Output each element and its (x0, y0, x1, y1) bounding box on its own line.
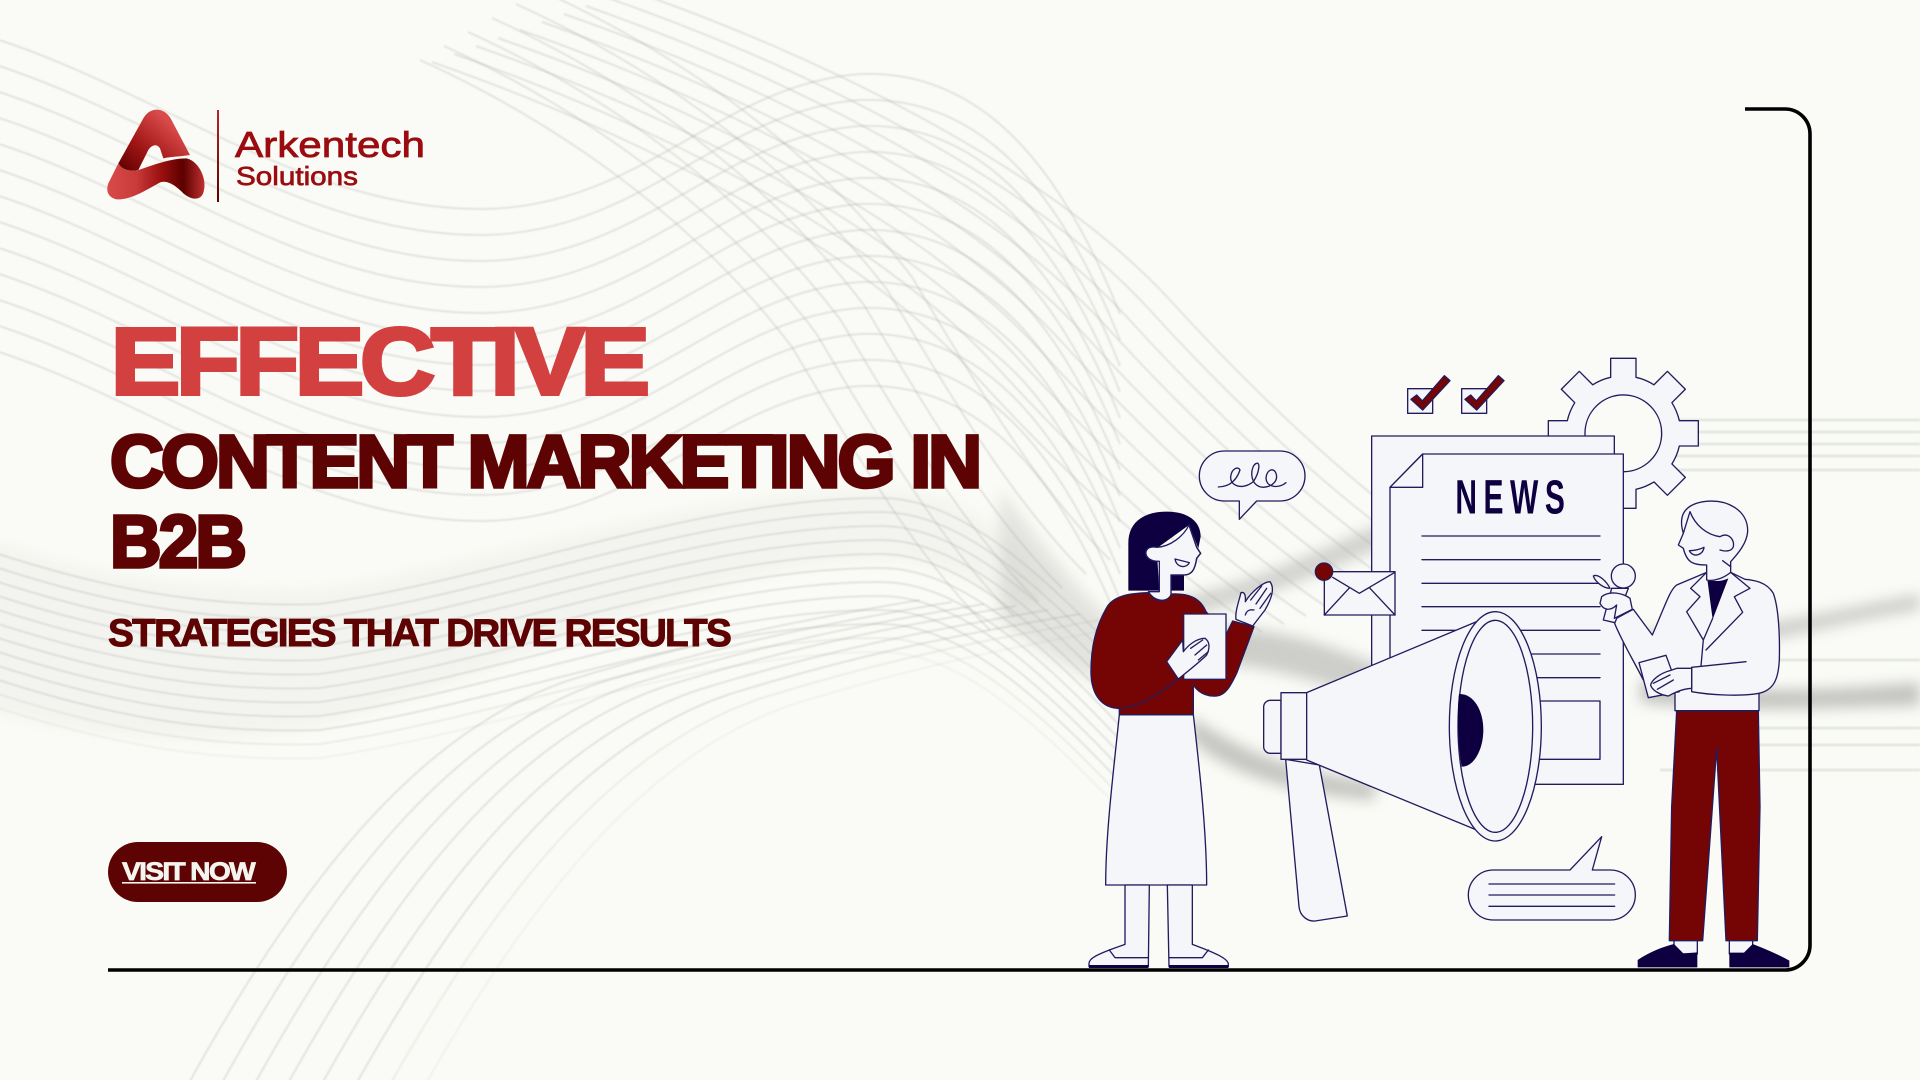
man head (1678, 501, 1748, 580)
woman sweater (1091, 593, 1254, 715)
logo wordmark: Arkentech (235, 124, 425, 165)
woman hair (1128, 512, 1201, 591)
button: visit now (108, 842, 287, 902)
button: visit now: VISIT NOW (122, 858, 256, 886)
woman (1089, 512, 1272, 968)
man note card (1639, 655, 1679, 698)
man jacket (1613, 572, 1779, 711)
heading: effective: EFFECTIVE (111, 309, 646, 415)
icon: checkboxes (1408, 376, 1504, 413)
woman legs and shoes (1089, 885, 1228, 968)
megaphone bell (1449, 612, 1541, 841)
icon: logo mark (107, 110, 205, 199)
background wave lines (0, 0, 1460, 1080)
logo subtitle: Solutions (236, 161, 358, 191)
megaphone handle (1286, 759, 1347, 921)
man hand (1651, 668, 1692, 696)
man trousers (1669, 711, 1760, 941)
man lapels (1687, 572, 1759, 695)
news title: NEWS (1455, 470, 1565, 524)
woman skirt (1106, 715, 1207, 885)
man socks and shoes (1638, 941, 1789, 967)
woman face (1146, 525, 1201, 600)
logo (107, 110, 425, 202)
man shirt (1707, 578, 1728, 619)
speech bubble: bottom (1468, 837, 1635, 920)
megaphone (1264, 612, 1541, 921)
logo divider (217, 110, 219, 202)
man microphone (1593, 564, 1635, 623)
background grey bands (0, 420, 1920, 800)
subheading: STRATEGIES THAT DRIVE RESULTS (108, 612, 731, 655)
news pages (1372, 436, 1623, 784)
illustration (1089, 358, 1789, 968)
frame lines (108, 109, 1810, 970)
woman tablet (1184, 614, 1226, 679)
icon: envelope (1315, 563, 1395, 615)
news text lines (1422, 536, 1600, 678)
megaphone cone (1307, 622, 1477, 830)
woman hand on tablet (1167, 638, 1209, 679)
woman raised hand (1236, 582, 1272, 626)
icon: gear (1548, 358, 1698, 508)
man (1593, 501, 1789, 967)
heading: b2b: B2B (110, 500, 245, 583)
heading: content marketing in: CONTENT MARKETING IN (110, 420, 979, 503)
megaphone back (1264, 700, 1281, 753)
speech bubble: woman (1199, 451, 1305, 519)
